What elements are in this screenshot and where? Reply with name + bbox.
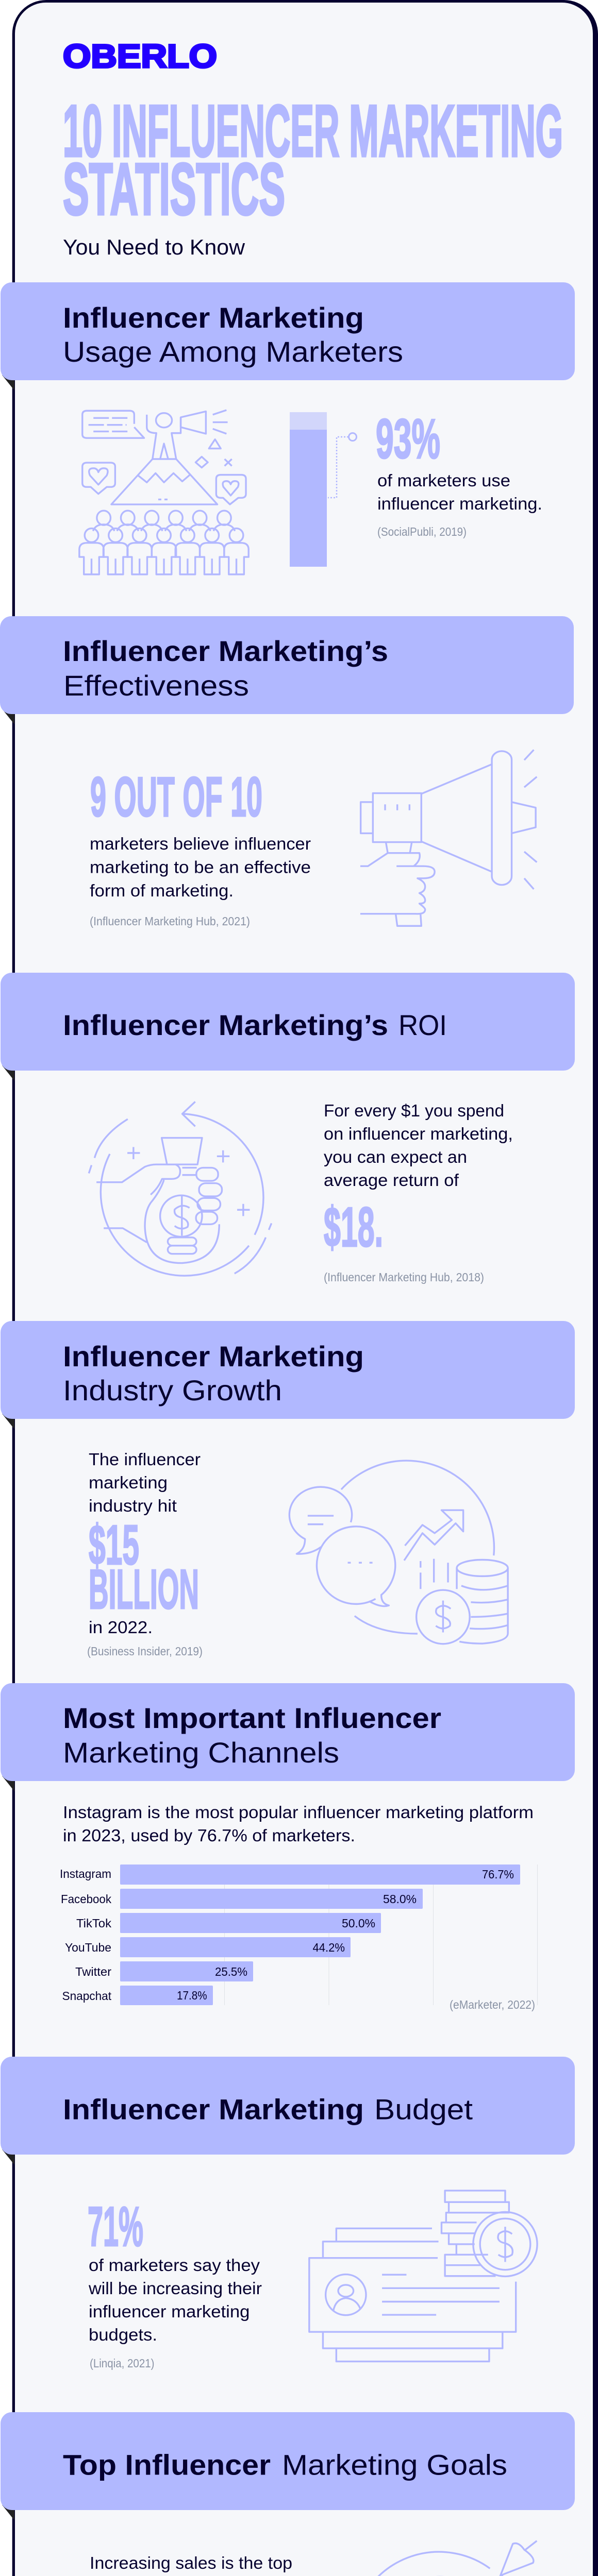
stat: 71 percent: influencer marketing [89, 2302, 250, 2321]
heading banner: usage: Usage Among Marketers [63, 335, 403, 368]
stat: 93 percent: (SocialPubli, 2019) [377, 525, 467, 538]
stat: 93 percent [376, 408, 542, 538]
stat: 18 dollars return: average return of [324, 1171, 459, 1190]
bar: Twitter: 25.5% [215, 1965, 247, 1978]
heading banner: goals: Marketing Goals [282, 2448, 507, 2481]
section: effectiveness [0, 616, 574, 928]
heading banner: channels [1, 1683, 575, 1791]
stat: 18 dollars return: (Influencer Marketing Hub, 2018) [324, 1270, 484, 1284]
section: goals [1, 2412, 575, 2576]
bar: Instagram: 76.7% [482, 1868, 514, 1881]
stat: 18 dollars return [324, 1101, 513, 1284]
heading banner: industry growth: Influencer Marketing [63, 1340, 364, 1372]
bar: Snapchat: Snapchat [62, 1989, 112, 2003]
title [63, 90, 563, 230]
bar: Instagram: Instagram [60, 1867, 111, 1880]
bar: Twitter: Twitter [75, 1965, 111, 1978]
logo: OBERLO [63, 38, 217, 75]
stat: 71 percent [88, 2195, 262, 2370]
stat: 15 billion: BILLION [89, 1558, 199, 1621]
chart: 93 percent bar with connector [290, 412, 357, 567]
stat: 15 billion [87, 1450, 203, 1658]
stat: 71 percent: 71% [88, 2195, 143, 2258]
icon: profile cards and coins [309, 2191, 537, 2362]
bar: TikTok: TikTok [76, 1917, 112, 1930]
heading banner: usage: Influencer Marketing [63, 301, 364, 334]
source: eMarketer: (eMarketer, 2022) [450, 1998, 535, 2011]
heading banner: industry growth [1, 1321, 575, 1429]
stat: 71 percent: of marketers say they [89, 2256, 260, 2275]
heading banner: effectiveness: Influencer Marketing’s [63, 635, 388, 667]
heading banner: industry growth: Industry Growth [63, 1374, 282, 1406]
icon: person with megaphone on mountain and crowd [79, 410, 248, 574]
stat: 9 out of 10: 9 OUT OF 10 [90, 766, 262, 828]
heading banner: ROI: Influencer Marketing’s [63, 1009, 388, 1041]
stat: 93 percent: 93% [376, 408, 440, 470]
stat: 18 dollars return: $18. [324, 1196, 383, 1259]
heading banner: channels: Marketing Channels [63, 1736, 339, 1769]
bar: YouTube: 44.2% [312, 1941, 345, 1954]
heading banner: effectiveness: Effectiveness [63, 669, 249, 702]
heading banner: budget [1, 2057, 575, 2165]
stat: 9 out of 10 [90, 766, 311, 928]
section: industry growth [1, 1321, 575, 1658]
section: marketing channels [1, 1683, 575, 2011]
section: ROI [1, 973, 575, 1284]
stat: 9 out of 10: (Influencer Marketing Hub, 2021) [90, 914, 250, 928]
text block: Instagram summary [63, 1803, 534, 1845]
stat: 18 dollars return: on influencer marketing, [324, 1124, 513, 1143]
stat: 15 billion: industry hit [89, 1496, 177, 1515]
bar chart: channels [60, 1865, 537, 2005]
bar: Snapchat [62, 1986, 213, 2005]
heading banner: budget: Budget [374, 2093, 473, 2126]
text block: Instagram summary: in 2023, used by 76.7% of marketers. [63, 1826, 355, 1845]
stat: 71 percent: budgets. [89, 2325, 157, 2344]
stat: 93 percent: influencer marketing. [377, 494, 542, 513]
bar: Facebook: Facebook [61, 1892, 111, 1906]
heading banner: effectiveness [0, 616, 574, 724]
heading banner: ROI [1, 973, 575, 1081]
section: usage among marketers [1, 282, 575, 574]
icon: hand holding money bag [89, 1101, 272, 1276]
stat: 18 dollars return: you can expect an [324, 1147, 467, 1166]
stat: 36.7 percent: Increasing sales is the top [90, 2553, 292, 2572]
stat: 18 dollars return: For every $1 you spend [324, 1101, 504, 1120]
stat: 71 percent: (Linqia, 2021) [90, 2357, 155, 2370]
bar: YouTube [65, 1937, 351, 1957]
heading banner: goals [1, 2412, 575, 2520]
stat: 15 billion: (Business Insider, 2019) [87, 1645, 203, 1658]
stat: 15 billion: in 2022. [89, 1618, 153, 1637]
icon: megaphone in hand [360, 750, 537, 926]
stat: 71 percent: will be increasing their [88, 2279, 262, 2298]
bar: YouTube: YouTube [65, 1941, 111, 1954]
stat: 15 billion: $15 [89, 1514, 139, 1577]
heading banner: ROI: ROI [398, 1009, 447, 1041]
section: budget [1, 2057, 575, 2370]
bar: Facebook: 58.0% [383, 1892, 417, 1906]
bar: Snapchat: 17.8% [177, 1989, 207, 2002]
heading banner: goals: Top Influencer [63, 2448, 271, 2481]
bar: TikTok [76, 1913, 381, 1933]
stat: 9 out of 10: form of marketing. [90, 881, 234, 900]
stat: 9 out of 10: marketing to be an effective [90, 857, 311, 877]
stat: 93 percent: of marketers use [377, 471, 510, 490]
stat: 9 out of 10: marketers believe influencer [90, 834, 311, 853]
stat: 15 billion: marketing [89, 1473, 168, 1492]
heading banner: usage [1, 282, 575, 391]
icon: target with arrow [352, 2541, 537, 2576]
stat: 15 billion: The influencer [89, 1450, 201, 1469]
bar: Instagram [60, 1865, 520, 1885]
bar: Twitter [75, 1961, 253, 1981]
subtitle: You Need to Know [63, 235, 245, 259]
text block: Instagram summary: Instagram is the most popular influencer marketing platform [63, 1803, 534, 1822]
title: STATISTICS [63, 148, 285, 230]
bar: Facebook [61, 1889, 423, 1909]
heading banner: channels: Most Important Influencer [63, 1702, 441, 1734]
bar: TikTok: 50.0% [342, 1917, 375, 1930]
heading banner: budget: Influencer Marketing [63, 2093, 364, 2126]
icon: chat bubbles, growth arrow and coins [289, 1461, 508, 1644]
